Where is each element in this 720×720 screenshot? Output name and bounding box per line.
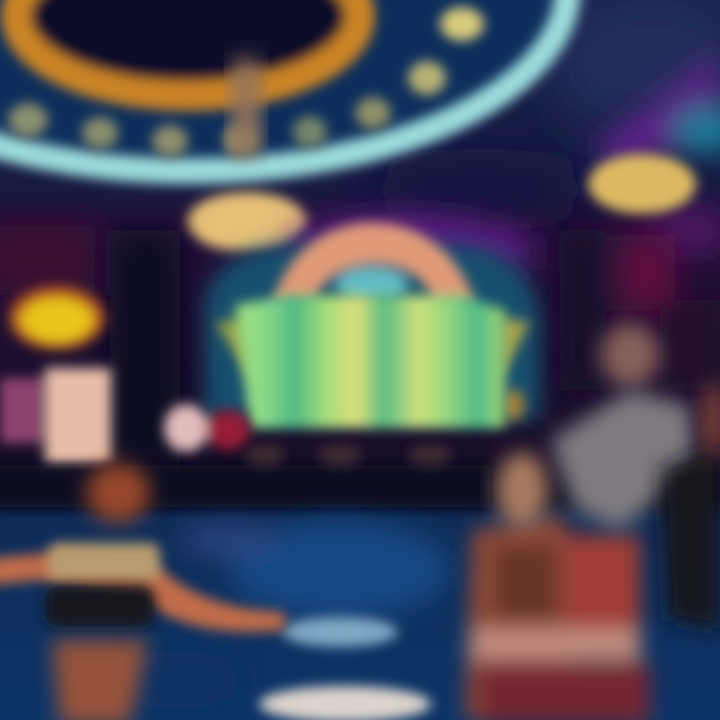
person right bbox=[496, 323, 720, 630]
back wall: maroon and purple drapes bbox=[0, 212, 720, 470]
hanging lamp centre bbox=[187, 192, 307, 252]
stage: teal backdrop bbox=[205, 245, 540, 420]
hanging lamp right bbox=[588, 154, 696, 214]
person left: legs bbox=[52, 640, 148, 720]
ceiling ring: blue band bbox=[0, 0, 560, 165]
stage: side wings bbox=[215, 318, 530, 421]
stage: green slot machine panels bbox=[235, 295, 505, 428]
floor: white cards bbox=[259, 617, 431, 720]
ceiling: dark right side bbox=[370, 0, 720, 215]
person left: arms bbox=[0, 552, 285, 632]
person right: dark figure bbox=[660, 445, 720, 630]
person right: torso bbox=[550, 390, 695, 530]
ceiling ring: gold lights bbox=[8, 7, 484, 157]
red chairs right bbox=[465, 515, 650, 720]
person left: hair bbox=[86, 463, 150, 523]
ceiling: purple accents and blue light bbox=[590, 50, 720, 255]
ceiling ring: hanging pole bbox=[232, 60, 260, 155]
person left: dark waist bbox=[45, 585, 155, 627]
stage: rainbow arch bbox=[272, 222, 475, 305]
red seats by stage bbox=[164, 404, 250, 452]
dark counter bbox=[0, 465, 490, 507]
ceiling ring: cyan neon outline bbox=[0, 0, 568, 171]
person right: head bbox=[600, 323, 660, 387]
person right: arm bbox=[496, 452, 548, 528]
yellow lamp left bbox=[9, 286, 105, 350]
blue floor highlights bbox=[120, 522, 450, 710]
person right: far edge skin bbox=[700, 382, 720, 458]
person left bbox=[0, 463, 285, 720]
person left: striped top bbox=[48, 543, 160, 581]
left machine: pink panel bbox=[0, 368, 111, 466]
row of muted figures bbox=[245, 444, 452, 466]
ceiling ring: orange inner ring bbox=[16, 0, 360, 96]
